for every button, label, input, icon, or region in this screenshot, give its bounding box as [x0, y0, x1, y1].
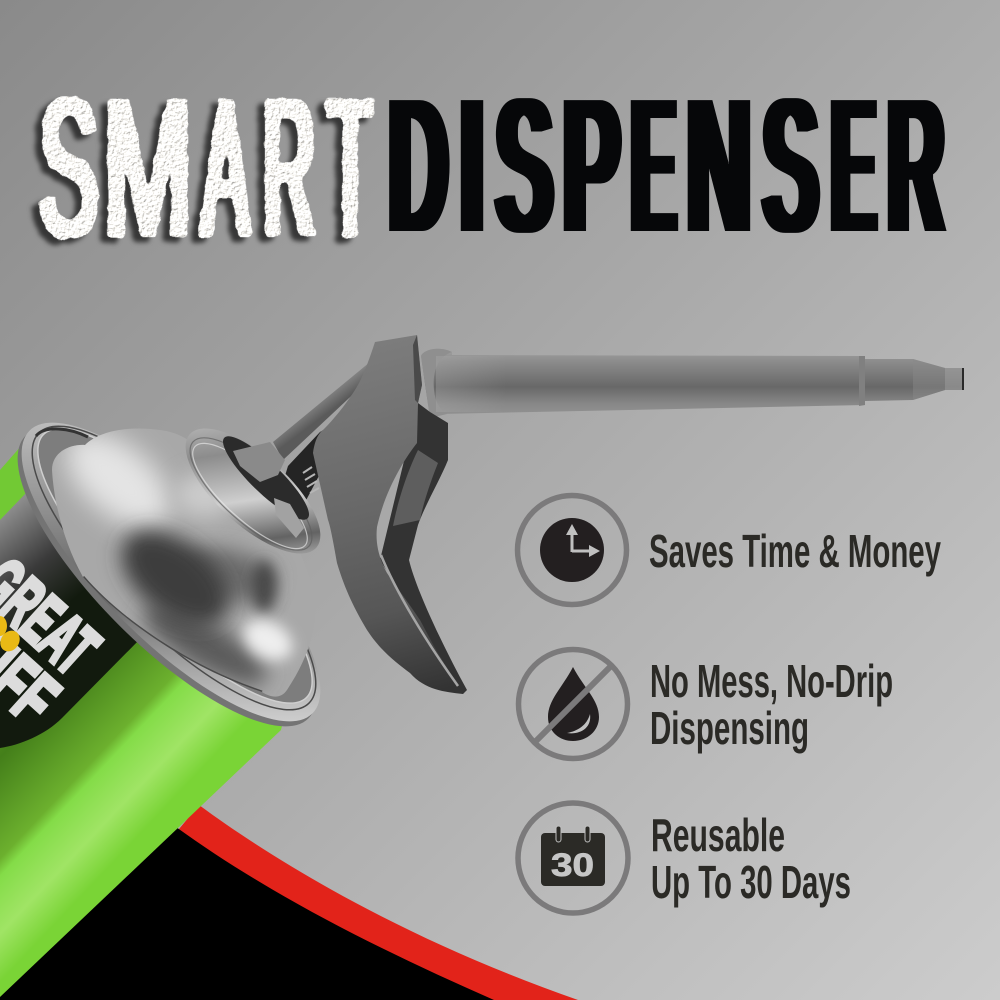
icon: spring	[303, 467, 319, 493]
feature row: reusable	[518, 803, 851, 913]
heading: SMART	[40, 59, 372, 277]
heading: DISPENSER	[389, 56, 944, 275]
heading: SMART: S	[40, 59, 98, 277]
heading: DISPENSER: P	[563, 56, 620, 275]
icon: foam drips	[0, 616, 20, 652]
icon: calendar: 30	[551, 847, 594, 883]
heading: DISPENSER: S	[496, 56, 553, 275]
icon: crossed drop	[518, 650, 628, 758]
label line 2: Up To 30 Days	[651, 856, 851, 908]
dispenser stem	[273, 362, 376, 508]
spray can rim	[0, 382, 361, 767]
trigger inner panel	[393, 450, 438, 526]
heading: DISPENSER: N	[687, 56, 751, 275]
dispenser neck	[233, 442, 285, 482]
red swoosh	[120, 805, 578, 1000]
trigger	[313, 335, 467, 694]
heading: DISPENSER: E	[831, 56, 876, 275]
icon: calendar	[518, 803, 628, 913]
feature row: saves time and money	[518, 496, 941, 604]
green can body	[0, 445, 283, 997]
spray can dome	[52, 428, 309, 697]
can label	[0, 494, 137, 748]
heading: DISPENSER: I	[460, 56, 484, 275]
heading: SMART: M	[103, 59, 192, 277]
feature row: no mess	[518, 650, 893, 758]
icon: clock	[518, 496, 626, 604]
black swoosh	[0, 827, 494, 1000]
heading: DISPENSER: D	[389, 56, 448, 275]
trigger back	[380, 403, 467, 694]
label: Reusable	[651, 809, 785, 861]
label line 2: Dispensing	[650, 702, 809, 754]
spray can collar	[166, 408, 340, 574]
text: T	[328, 59, 372, 277]
heading: DISPENSER: S	[763, 56, 819, 275]
trigger face	[313, 335, 465, 694]
dispenser nozzle tube	[421, 349, 964, 418]
heading: SMART: A	[202, 59, 249, 277]
heading: DISPENSER: E	[631, 56, 676, 275]
heading: SMART: R	[263, 59, 314, 277]
